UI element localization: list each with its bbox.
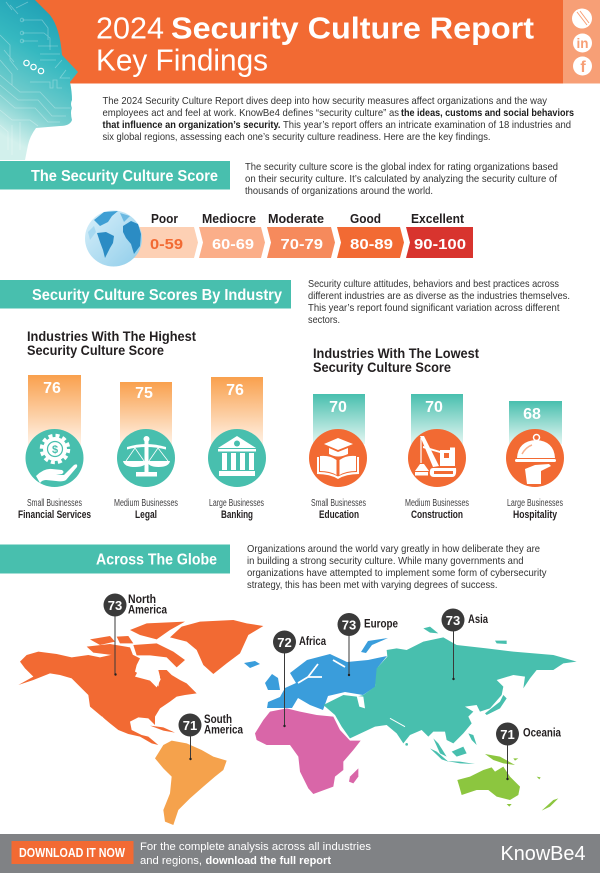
globe description: in building a strong security culture. While many governments and — [247, 555, 524, 567]
globe description: strategy, this has been met with varying degrees of success. — [247, 579, 498, 591]
card: construction: Construction — [411, 509, 463, 521]
industry description — [308, 278, 570, 326]
card: financial services: $ — [52, 444, 58, 456]
heading: lowest scores: Security Culture Score — [313, 359, 451, 375]
world map — [18, 620, 577, 825]
score scale chevrons: 90-100 — [414, 236, 466, 253]
download button — [12, 841, 134, 864]
card: education: Education — [319, 509, 359, 521]
card: education — [309, 394, 367, 521]
icon: social links: f — [580, 59, 586, 76]
icon: social links: in — [576, 36, 588, 51]
score scale chevrons: Moderate — [268, 211, 324, 226]
heading: highest scores — [27, 328, 196, 358]
icon: globe — [85, 210, 142, 266]
score scale chevrons: Excellent — [411, 211, 465, 226]
title: Security Culture Report — [171, 10, 534, 46]
heading: lowest scores — [313, 345, 479, 375]
globe description: organizations have attempted to implement some form of cybersecurity — [247, 567, 547, 579]
pin: africa 72: Africa — [299, 634, 326, 648]
heading: highest scores: Security Culture Score — [27, 342, 164, 358]
pin: oceania 71 — [496, 722, 561, 780]
pin: south america 71: America — [204, 722, 243, 736]
intro text: the ideas, customs and social behaviors — [401, 107, 574, 119]
card: construction: 70 — [425, 399, 443, 416]
score scale chevrons: 0-59 — [150, 236, 183, 253]
map: asia — [323, 627, 577, 764]
map: north america — [18, 620, 263, 745]
icon: social links — [572, 8, 592, 76]
card: financial services: 76 — [43, 380, 61, 397]
card: construction — [405, 394, 469, 521]
pin: europe 73: Europe — [364, 616, 398, 630]
pin: oceania 71: 71 — [500, 727, 515, 742]
pin: africa 72: 72 — [277, 635, 292, 650]
card: banking: 76 — [226, 382, 244, 399]
card: banking: Banking — [221, 509, 253, 521]
map: south america — [155, 741, 227, 825]
intro text: The 2024 Security Culture Report dives deep into how security measures affect organizations and the way — [102, 95, 548, 107]
title — [96, 10, 534, 78]
section heading: security culture score — [0, 161, 230, 190]
heading: lowest scores: Industries With The Lowest — [313, 345, 479, 361]
card: construction: Medium Businesses — [405, 498, 469, 509]
pin: africa 72 — [273, 630, 326, 727]
score scale chevrons — [128, 211, 473, 258]
score description: thousands of organizations around the world. — [245, 185, 433, 197]
card: legal: Legal — [135, 509, 157, 521]
map: oceania — [457, 754, 558, 811]
card: education: 70 — [329, 399, 347, 416]
section heading: scores by industry: Security Culture Scores By Industry — [32, 287, 282, 304]
pin: north america 73: 73 — [108, 598, 122, 613]
section heading: across the globe: Across The Globe — [96, 552, 217, 568]
card: banking: Large Businesses — [209, 498, 264, 509]
footer call to action: For the complete analysis across all industries — [140, 841, 372, 853]
footer call to action: and regions, — [140, 855, 202, 867]
globe description: Organizations around the world vary greatly in how deliberate they are — [247, 543, 540, 555]
card: banking — [208, 377, 266, 521]
pin: europe 73: 73 — [342, 618, 356, 632]
title: Key Findings — [96, 42, 268, 78]
score scale chevrons: 60-69 — [212, 236, 254, 253]
footer bar — [0, 834, 600, 873]
pin: south america 71: 71 — [183, 718, 197, 733]
pin: oceania 71: Oceania — [523, 726, 561, 740]
intro text: that influence an organization’s security. — [102, 119, 281, 131]
card: education: Small Businesses — [311, 498, 366, 509]
intro text: This year’s report offers an intricate examination of 18 industries and — [283, 119, 571, 131]
pin: north america 73 — [104, 592, 167, 676]
card: hospitality: Large Businesses — [507, 498, 563, 509]
card: hospitality: 68 — [523, 406, 541, 423]
pin: europe 73 — [338, 613, 398, 676]
icon: circuit head silhouette — [0, 0, 78, 160]
card: financial services: Small Businesses — [27, 498, 82, 509]
footer call to action: download the full report — [206, 855, 331, 867]
card: legal: 75 — [135, 385, 153, 402]
score description: on their security culture. It’s calculated by analyzing the security culture of — [245, 173, 557, 185]
section heading: security culture score: The Security Culture Score — [31, 168, 218, 185]
industry description: This year’s report found significant variation across different — [308, 302, 560, 314]
section heading: scores by industry — [0, 280, 291, 308]
intro text: employees act and feel at work. KnowBe4 defines “security culture” as — [102, 107, 399, 119]
pin: asia 73: 73 — [446, 613, 460, 628]
header banner — [0, 0, 600, 84]
intro text — [102, 95, 574, 143]
intro text: six global regions, assessing each one’s security culture readiness. Here are the key findings. — [102, 131, 490, 143]
section heading: across the globe — [0, 544, 230, 574]
score scale chevrons: 70-79 — [280, 236, 323, 253]
score scale chevrons: Good — [350, 211, 381, 226]
pin: south america 71 — [178, 712, 243, 760]
score scale chevrons: Mediocre — [202, 211, 256, 226]
logo: KnowBe4: KnowBe4 — [500, 843, 586, 865]
pin: north america 73: North — [128, 592, 156, 606]
card: financial services: Financial Services — [18, 509, 91, 521]
download button: DOWNLOAD IT NOW — [19, 846, 125, 860]
score scale chevrons: Poor — [151, 211, 178, 226]
footer call to action — [140, 841, 372, 867]
score scale chevrons: 80-89 — [350, 236, 393, 253]
score description — [245, 161, 558, 197]
heading: highest scores: Industries With The Highest — [27, 328, 196, 344]
pin: asia 73 — [442, 608, 488, 680]
globe description — [247, 543, 547, 591]
card: legal — [114, 382, 178, 521]
industry description: different industries are as diverse as the industries themselves. — [308, 290, 570, 302]
title: 2024 — [96, 10, 164, 46]
pin: south america 71: South — [204, 712, 232, 726]
pin: north america 73: America — [128, 602, 167, 616]
score description: The security culture score is the global index for rating organizations based — [245, 161, 558, 173]
industry description: sectors. — [308, 314, 340, 326]
card: legal: Medium Businesses — [114, 498, 178, 509]
card: hospitality — [506, 401, 564, 521]
card: financial services — [18, 375, 91, 521]
industry description: Security culture attitudes, behaviors and best practices across — [308, 278, 559, 290]
card: hospitality: Hospitality — [513, 509, 558, 521]
map: africa — [255, 708, 361, 794]
pin: asia 73: Asia — [468, 612, 488, 626]
map: europe — [244, 638, 388, 710]
